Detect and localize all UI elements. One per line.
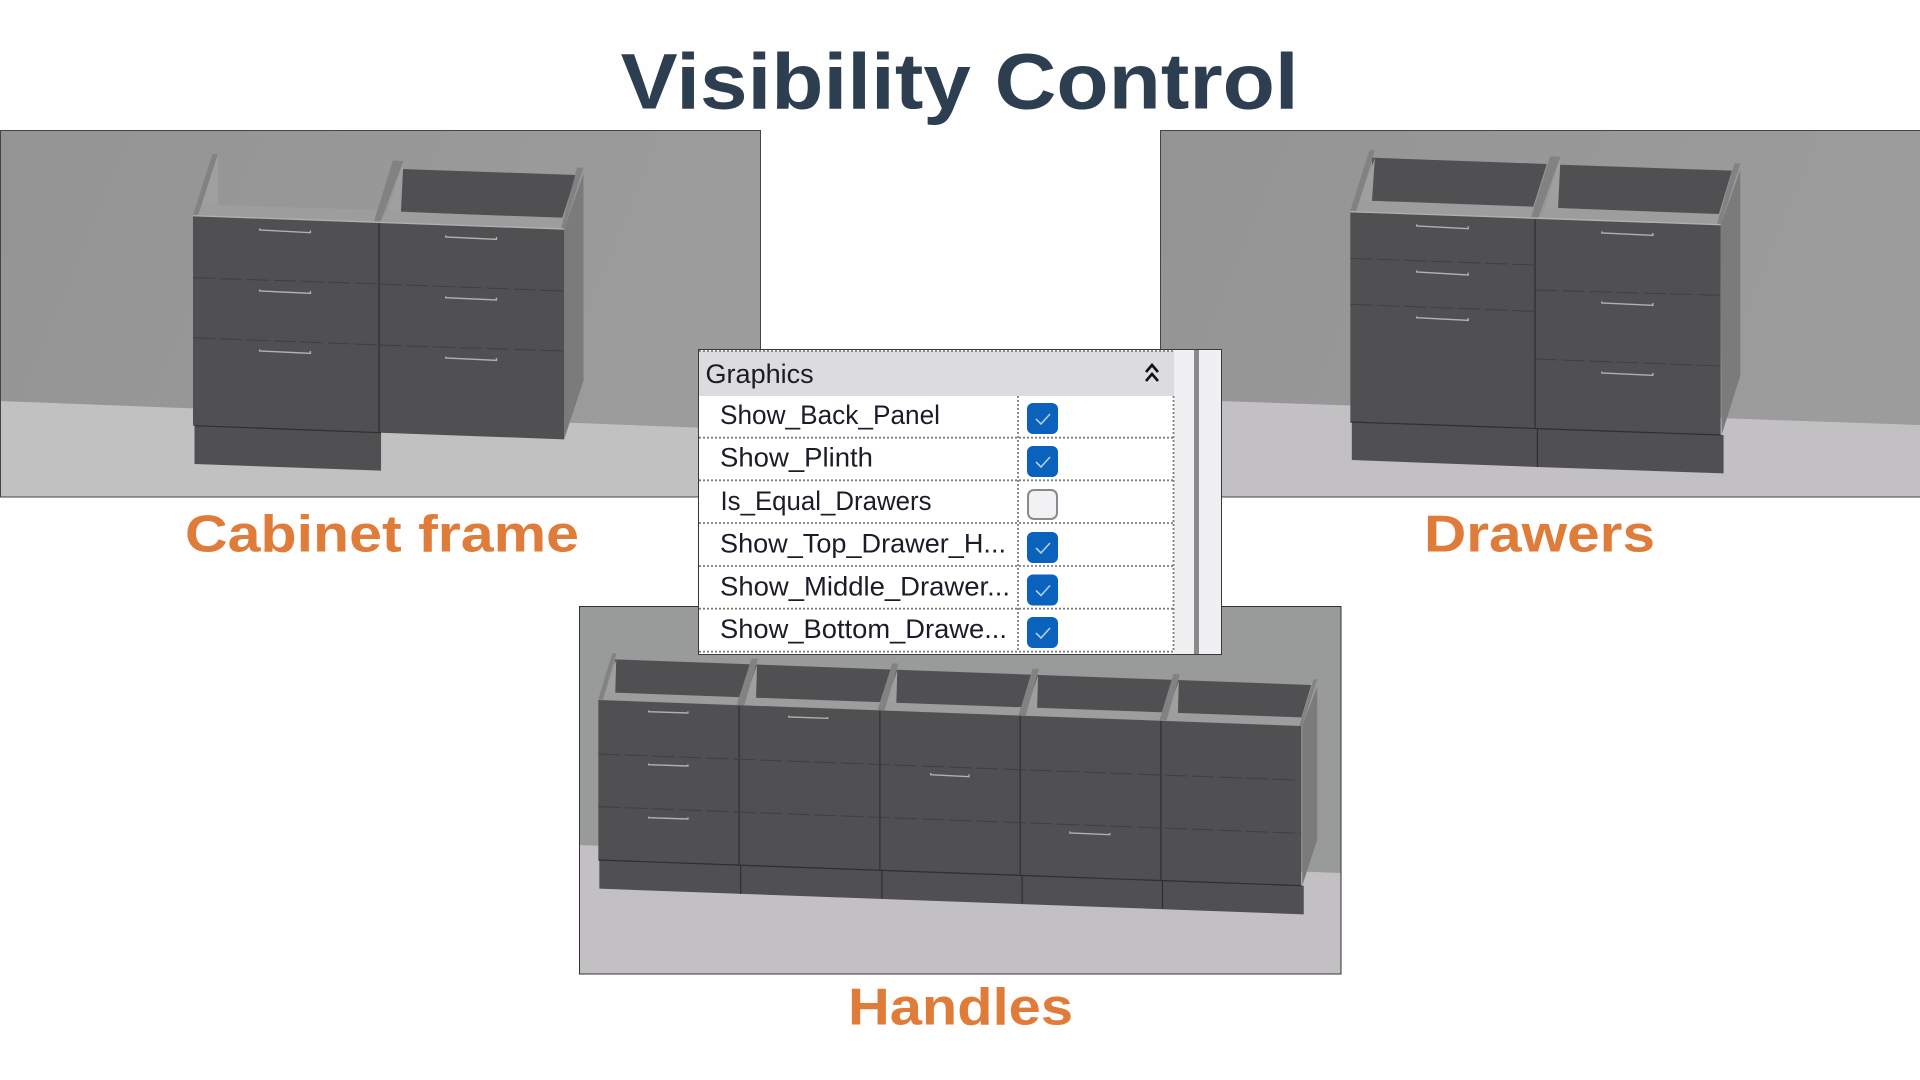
label: handles: Handles — [848, 978, 1073, 1036]
title: Visibility Control — [621, 36, 1299, 126]
row: Show_Bottom_Drawe...: Show_Bottom_Drawe... — [720, 614, 1007, 644]
row: Show_Plinth: Show_Plinth — [720, 443, 873, 473]
row: Show_Back_Panel — [720, 400, 1058, 434]
row: Show_Plinth — [720, 443, 1058, 477]
row: Show_Back_Panel: Show_Back_Panel — [720, 400, 940, 430]
panel: graphics properties — [698, 350, 1222, 654]
label: drawers: Drawers — [1424, 506, 1655, 564]
panel: cabinet frame render — [0, 130, 760, 497]
row: Is_Equal_Drawers — [720, 486, 1057, 519]
header row — [699, 351, 1174, 396]
cabinets without back panel on left unit — [193, 154, 584, 471]
row: Show_Top_Drawer_H...: Show_Top_Drawer_H... — [720, 529, 1006, 559]
panel: drawers render — [1160, 130, 1920, 497]
scrollbar — [1174, 350, 1221, 654]
label: cabinet frame: Cabinet frame — [185, 506, 579, 564]
row: Is_Equal_Drawers: Is_Equal_Drawers — [720, 486, 932, 516]
row: Show_Middle_Drawer...: Show_Middle_Drawer... — [720, 571, 1010, 601]
panel: handles render — [579, 606, 1341, 974]
header row: Graphics — [706, 359, 814, 389]
